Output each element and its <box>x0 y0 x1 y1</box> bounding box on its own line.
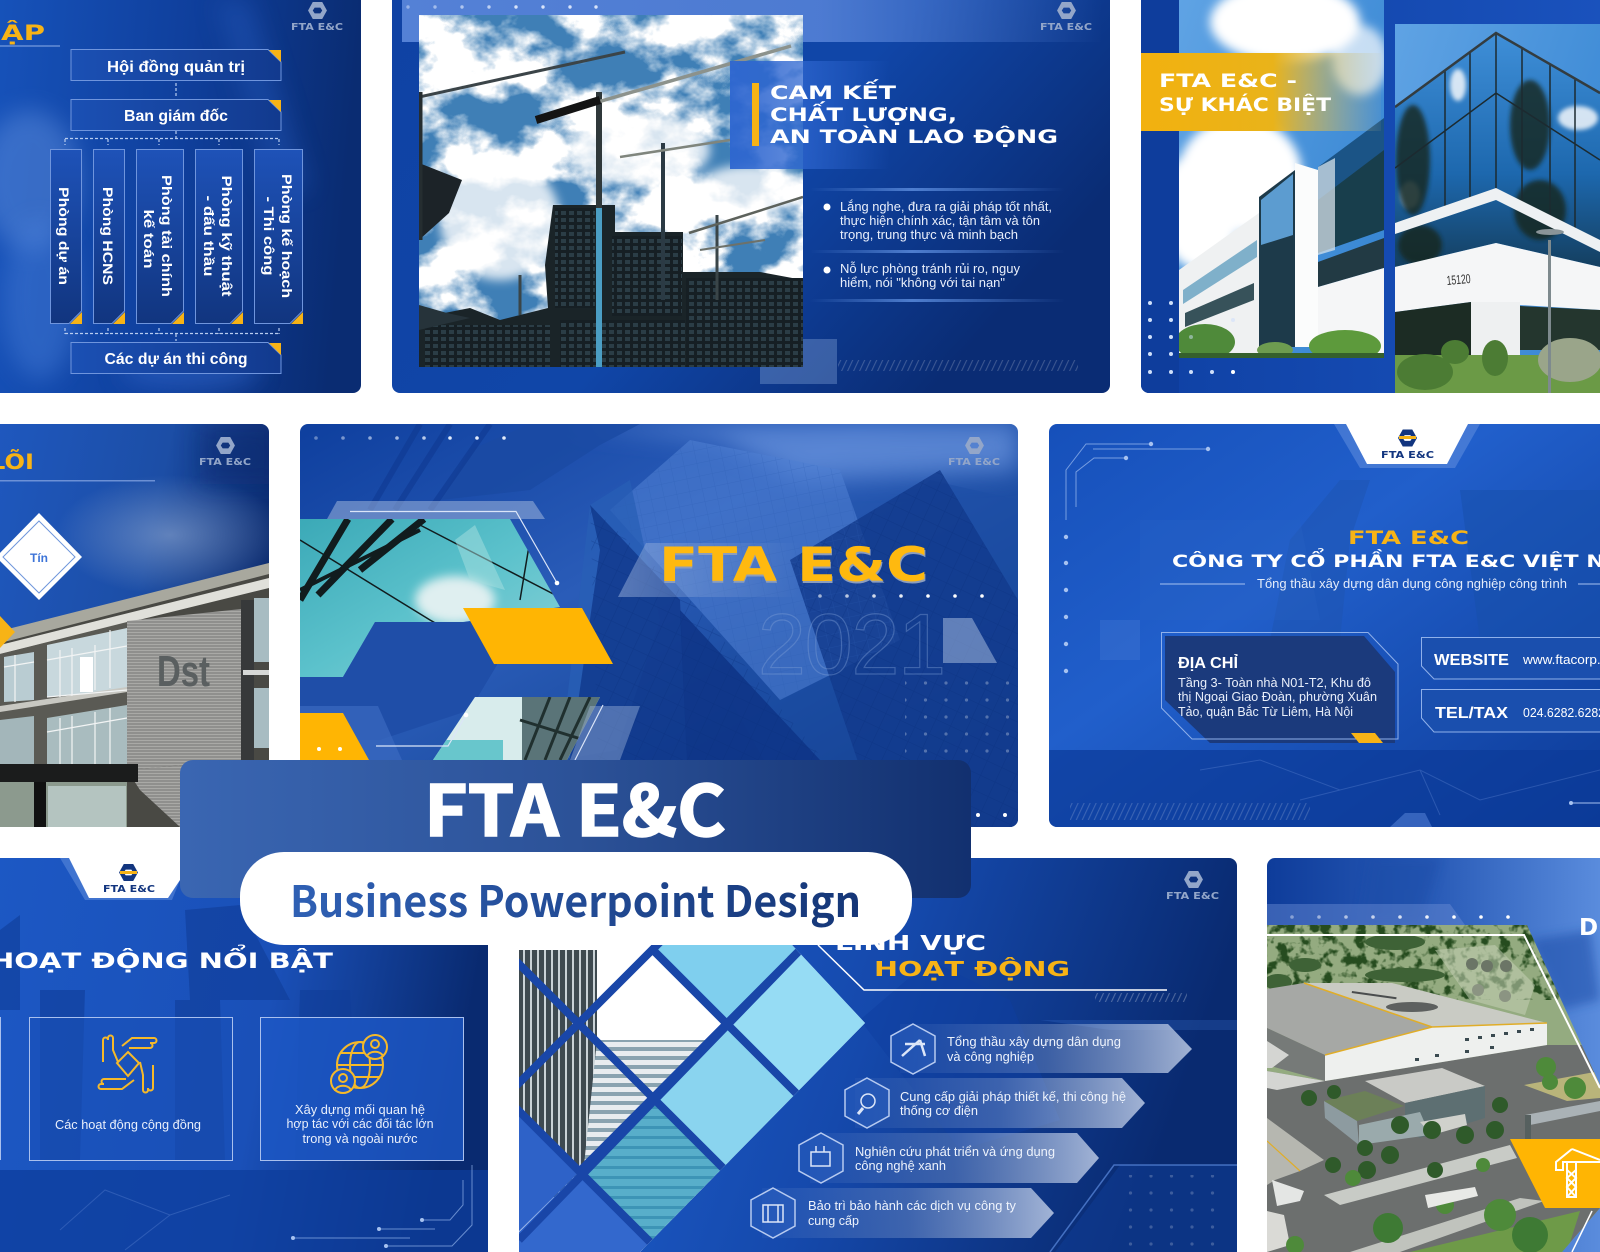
logo: FTA E&C <box>1166 871 1219 902</box>
glass towers <box>370 424 1018 827</box>
photo: office building left <box>1179 0 1384 358</box>
org box: Các dự án thi công: Các dự án thi công <box>104 351 248 368</box>
heading: commitment: CHẤT LƯỢNG, <box>770 100 957 126</box>
card: website: WEBSITE <box>1434 652 1509 669</box>
bullet list: commitments <box>824 199 1052 290</box>
heading: slide title fragment <box>0 19 60 46</box>
photo: aerial factory render <box>1264 925 1600 1252</box>
icon: crane <box>1556 1149 1600 1197</box>
office block <box>1365 1068 1485 1103</box>
panel: org chart slide <box>0 0 361 393</box>
card: address: thị Ngoại Giao Đoàn, phường Xuân <box>1178 689 1377 704</box>
card: partnerships: Xây dựng mối quan hệ <box>295 1102 425 1117</box>
icon: globe with people <box>331 1035 387 1093</box>
card: partnerships: trong và ngoài nước <box>302 1131 418 1146</box>
org box: Phòng dự án: Phòng dự án <box>56 187 72 285</box>
card: address: Tảo, quận Bắc Từ Liêm, Hà Nội <box>1178 704 1353 719</box>
title banner <box>180 756 971 898</box>
heading: commitment <box>770 78 1058 148</box>
card: partnerships: hợp tác với các đối tác lớn <box>286 1116 434 1131</box>
logo: FTA E&C: FTA E&C <box>199 457 251 468</box>
subtitle: Business Powerpoint Design: Business Powerpoint Design <box>290 868 861 930</box>
photo: cranes and construction site <box>419 15 805 367</box>
dots row <box>818 594 984 598</box>
icon: light bulb hexagon <box>845 1078 889 1128</box>
bullet list: commitments: Lắng nghe, đưa ra giải pháp tốt nhất, <box>840 199 1052 214</box>
org box: Hội đồng quản trị <box>71 50 281 80</box>
lawn right <box>1524 1071 1600 1101</box>
item: M&E solutions <box>845 1078 1145 1128</box>
logo: FTA E&C <box>200 437 250 465</box>
diamond: Tín <box>0 513 82 600</box>
shape: gold corner <box>300 713 369 760</box>
item: maintenance: cung cấp <box>808 1213 859 1228</box>
panel: cover slide FTA E&C <box>300 424 1018 827</box>
diamond: Tín: Tín <box>30 551 48 565</box>
logo: FTA E&C: FTA E&C <box>291 22 343 33</box>
roads <box>1267 1045 1600 1252</box>
circuit lines <box>293 1165 472 1246</box>
title: FTA E&C: FTA E&C <box>424 756 726 857</box>
panel: highlighted activities slide <box>0 858 488 1252</box>
heading: FTA E&C: FTA E&C <box>1348 527 1469 549</box>
heading: HOẠT ĐỘNG: HOẠT ĐỘNG <box>874 957 1070 981</box>
tagline: Tổng thầu xây dựng dân dụng công nghiệp công trình <box>1257 576 1567 591</box>
item: general contracting: và công nghiệp <box>947 1049 1034 1064</box>
diamond: gold <box>0 616 15 648</box>
panel: core values slide <box>0 424 285 827</box>
cranes <box>419 46 803 367</box>
photo: office building right <box>1395 24 1600 393</box>
subtitle pill <box>240 852 912 945</box>
panel: company contact slide <box>1049 424 1600 827</box>
org box: Hội đồng quản trị: Hội đồng quản trị <box>107 59 245 76</box>
heading: LĨNH VỰC: LĨNH VỰC <box>835 931 986 955</box>
bullet list: commitments: thực hiện chính xác, tận tâm và tôn <box>840 213 1040 228</box>
background towers <box>1049 480 1600 827</box>
org box: Ban giám đốc <box>71 100 281 130</box>
background towers <box>0 905 360 1160</box>
item: general contracting <box>891 1024 1192 1074</box>
bullet list: commitments: trọng, trung thực và minh bạch <box>840 227 1018 242</box>
left lower shed <box>1267 1118 1324 1185</box>
icon: crane hexagon <box>891 1024 935 1074</box>
heading: FTA E&C difference: FTA E&C - <box>1159 70 1297 92</box>
bullet list: commitments: Nỗ lực phòng tránh rủi ro, nguy <box>840 261 1021 276</box>
panel: aerial project slide <box>1264 858 1600 1252</box>
heading: slide title fragment: ẬP <box>1 19 45 45</box>
card: tel tax <box>1422 690 1600 732</box>
bullet list: commitments: hiểm, nói "không với tai nạn" <box>840 275 1005 290</box>
item: maintenance: Bảo trì bảo hành các dịch vụ công ty <box>808 1198 1016 1213</box>
org box: Phòng kế hoạch - Thi công <box>254 150 303 324</box>
org box: Phòng HCNS: Phòng HCNS <box>100 187 116 285</box>
item: green technology <box>799 1133 1099 1183</box>
card: address: Tầng 3- Toàn nhà N01-T2, Khu đô <box>1178 675 1371 690</box>
tab with logo <box>60 858 180 900</box>
org box: Các dự án thi công <box>71 342 281 374</box>
item: green technology: Nghiên cứu phát triển và ứng dụng <box>855 1144 1055 1159</box>
heading: company name: CÔNG TY CỔ PHẦN FTA E&C VIỆT NAM <box>1172 547 1600 572</box>
card: partnerships <box>260 1018 464 1160</box>
logo: FTA E&C: FTA E&C <box>1040 22 1092 33</box>
dot grid <box>1148 301 1235 374</box>
photo: Dst building <box>0 563 269 827</box>
item: maintenance <box>751 1188 1054 1238</box>
tab with logo <box>1334 424 1480 468</box>
item: M&E solutions: Cung cấp giải pháp thiết kế, thi công hệ <box>900 1089 1126 1104</box>
building mass <box>419 205 803 367</box>
connector: dashed lines bottom <box>65 328 279 341</box>
logo: FTA E&C <box>948 437 1000 468</box>
photo: tower in diamond lattice <box>505 876 880 1252</box>
circuit lines <box>1066 444 1208 520</box>
photo: lower glass hexagon <box>433 697 603 767</box>
item: M&E solutions: thống cơ điện <box>900 1103 978 1118</box>
icon: joined hands <box>98 1036 156 1092</box>
title: FTA E&C: FTA E&C <box>659 538 928 593</box>
card: address <box>1162 632 1398 743</box>
item: general contracting: Tổng thầu xây dựng dân dụng <box>947 1034 1121 1049</box>
panel: commitment slide <box>392 0 1110 393</box>
org box: Phòng HCNS <box>94 150 125 324</box>
org box: Phòng kế hoạch - Thi công: - Thi công <box>261 196 277 276</box>
org box: Phòng tài chính kế toán <box>136 150 184 324</box>
card: community activities <box>30 1018 232 1160</box>
photo: office building right: 15120 <box>1446 271 1471 288</box>
photo: teal glass hexagon <box>300 519 570 679</box>
icon: machine hexagon <box>799 1133 843 1183</box>
year 2021 outline: 2021 <box>758 597 946 693</box>
accent bar <box>752 83 759 146</box>
dots row <box>1290 915 1510 919</box>
org box: Phòng tài chính kế toán: kế toán <box>141 210 157 268</box>
warehouse <box>1267 983 1547 1055</box>
org box: Phòng dự án <box>50 150 82 324</box>
heading: slide title fragment: D <box>1579 915 1598 941</box>
card: address: ĐỊA CHỈ <box>1178 653 1239 672</box>
panel: business fields slide <box>505 858 1237 1252</box>
card: website <box>1422 638 1600 679</box>
title box <box>730 61 872 169</box>
heading: FTA E&C difference <box>1159 70 1331 116</box>
org box: Phòng kế hoạch - Thi công: Phòng kế hoạch <box>279 174 295 298</box>
icon: tower hexagon <box>751 1188 795 1238</box>
heading: FTA E&C difference: SỰ KHÁC BIỆT <box>1159 92 1331 116</box>
logo: FTA E&C <box>292 2 342 30</box>
hexagon: dark blue <box>300 622 497 740</box>
trees <box>1286 1057 1586 1252</box>
org box: Phòng kỹ thuật - đấu thầu <box>196 150 243 324</box>
panel: FTA difference slide <box>1141 0 1600 393</box>
dots row <box>314 436 506 440</box>
item: green technology: công nghệ xanh <box>855 1158 946 1173</box>
connector lines <box>350 512 603 760</box>
tab with logo: FTA E&C <box>1381 450 1434 461</box>
connector: dashed lines top <box>65 83 279 145</box>
org box: Phòng kỹ thuật - đấu thầu: - đấu thầu <box>201 196 217 276</box>
card: community activities: Các hoạt động cộng đồng <box>55 1117 201 1132</box>
logo: FTA E&C: FTA E&C <box>1166 891 1219 902</box>
org box: Phòng kỹ thuật - đấu thầu: Phòng kỹ thuật <box>219 176 235 297</box>
logo: FTA E&C <box>1041 2 1092 30</box>
tab with logo: FTA E&C <box>103 884 155 895</box>
hexagon: gold with crane icon <box>1510 1139 1600 1208</box>
card: tel tax: TEL/TAX <box>1435 705 1508 722</box>
logo: FTA E&C: FTA E&C <box>948 457 1000 468</box>
sidewalks <box>1324 1145 1517 1205</box>
heading: commitment: AN TOÀN LAO ĐỘNG <box>770 124 1058 148</box>
dots column <box>1064 535 1068 673</box>
gold banner <box>1141 53 1381 131</box>
shape: gold parallelogram large <box>463 608 613 664</box>
photo: Dst building: Dst <box>157 647 210 696</box>
title: FTA E&C: FTA E&C <box>659 540 929 595</box>
org box: Phòng tài chính kế toán: Phòng tài chính <box>159 175 175 297</box>
dots row <box>406 5 598 9</box>
org box: Ban giám đốc: Ban giám đốc <box>124 108 228 125</box>
heading: commitment: CAM KẾT <box>770 78 896 104</box>
